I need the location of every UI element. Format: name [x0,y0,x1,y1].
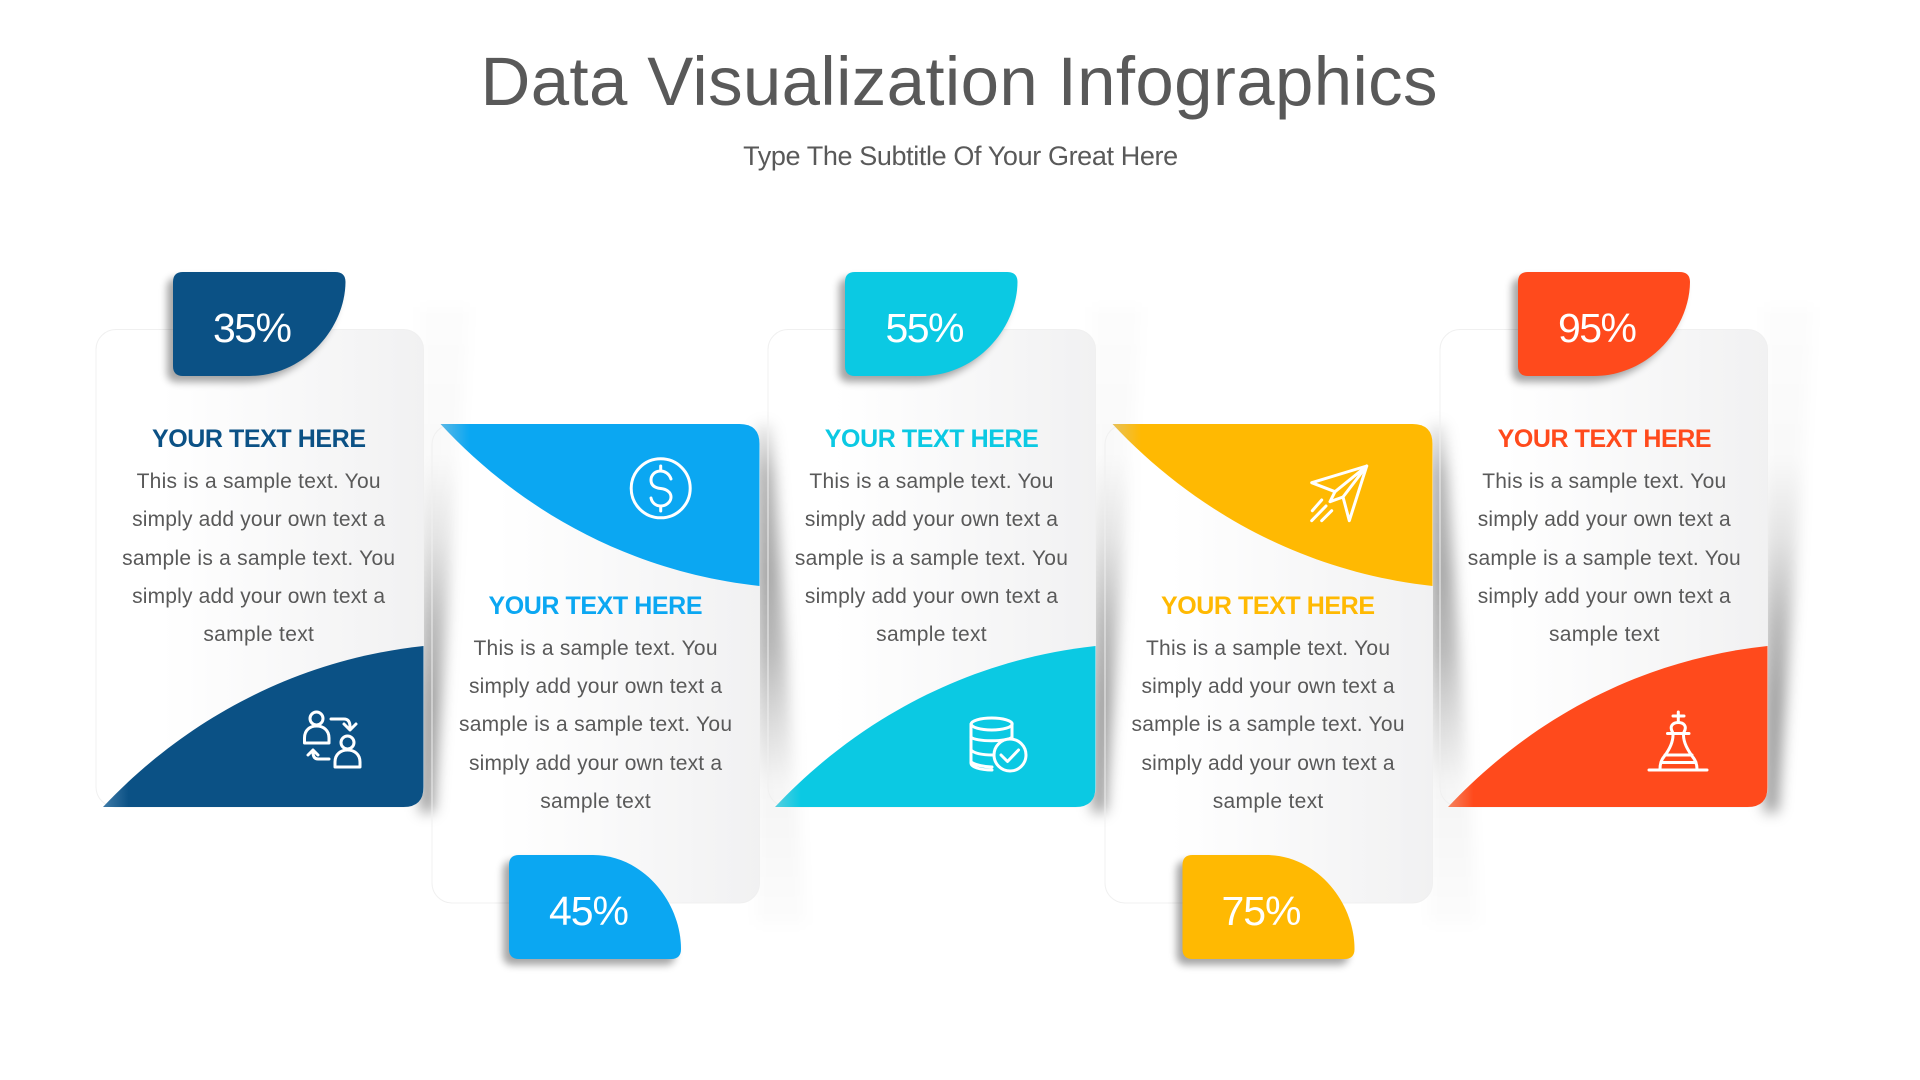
panel: card 1 35% [96,272,470,812]
icon: people exchange [304,712,360,767]
card 3 percent tab: 55% [886,305,964,351]
card 4 body text: simply add your own text a [1142,675,1395,698]
card 2 percent tab [503,855,681,965]
card 3 body text: simply add your own text a [805,508,1058,531]
card 2 top swoosh [440,424,760,586]
icon: chess king [1649,712,1707,770]
card 3 body text: This is a sample text. You [809,470,1053,493]
card 2 heading: YOUR TEXT HERE [488,592,702,620]
card 5 percent tab [1512,272,1690,382]
card 2 percent tab: 45% [549,888,629,934]
card 4 body text: simply add your own text a [1142,752,1395,775]
card 4 body text: sample is a sample text. You [1132,713,1404,736]
icon: dollar coin [631,459,690,518]
card 3 body text: simply add your own text a [805,585,1058,608]
card 1 percent tab [167,272,346,382]
card 3 body text: sample text [876,623,987,646]
card 3 percent tab [839,272,1018,382]
card 5 body text: sample is a sample text. You [1468,547,1741,570]
card 2 body text: simply add your own text a [469,752,722,775]
card 2 body text [459,637,732,813]
card 4 heading: YOUR TEXT HERE [1161,592,1375,620]
icon: paper plane [1312,466,1367,521]
card 4 body text [1132,637,1404,813]
card 3 body text: sample is a sample text. You [795,547,1068,570]
card 1 bottom swoosh [103,646,424,807]
title: Data Visualization Infographics [480,43,1438,120]
card 2 body text: sample text [540,790,651,813]
card 5 heading: YOUR TEXT HERE [1498,425,1712,453]
card 5 bottom swoosh [1448,646,1768,807]
card 1 body text: sample is a sample text. You [122,547,395,570]
card 5 body text: sample text [1549,623,1660,646]
card 1 body text: sample text [203,623,314,646]
card 2 body text: sample is a sample text. You [459,713,732,736]
panel: card 5 95% [1440,272,1814,812]
card 5 body text: simply add your own text a [1478,585,1731,608]
card 1 body text: simply add your own text a [132,508,385,531]
card 3 body text [795,470,1068,646]
icon: database check [971,718,1026,771]
card 4 percent tab: 75% [1222,888,1302,934]
card 1 body text: This is a sample text. You [137,470,381,493]
card 5 body text: This is a sample text. You [1482,470,1726,493]
card 2 body text: simply add your own text a [469,675,722,698]
card 3 heading: YOUR TEXT HERE [825,425,1039,453]
card 2 body text: This is a sample text. You [474,637,718,660]
card 4 top swoosh [1112,424,1432,586]
subtitle: Type The Subtitle Of Your Great Here [743,141,1178,171]
card 5 body text: simply add your own text a [1478,508,1731,531]
panel: card 3 55% [768,272,1142,812]
card 1 percent tab: 35% [213,305,292,351]
card 4 body text: sample text [1213,790,1323,813]
card 3 bottom swoosh [775,646,1096,807]
panel: card 4 75% [1105,424,1479,965]
card 1 body text: simply add your own text a [132,585,385,608]
card 5 body text [1468,470,1741,646]
card 1 heading: YOUR TEXT HERE [152,425,366,453]
card 5 percent tab: 95% [1558,305,1637,351]
card 4 percent tab [1176,855,1354,965]
card 1 body text [122,470,395,646]
panel: card 2 45% [432,424,806,965]
card 4 body text: This is a sample text. You [1146,637,1390,660]
